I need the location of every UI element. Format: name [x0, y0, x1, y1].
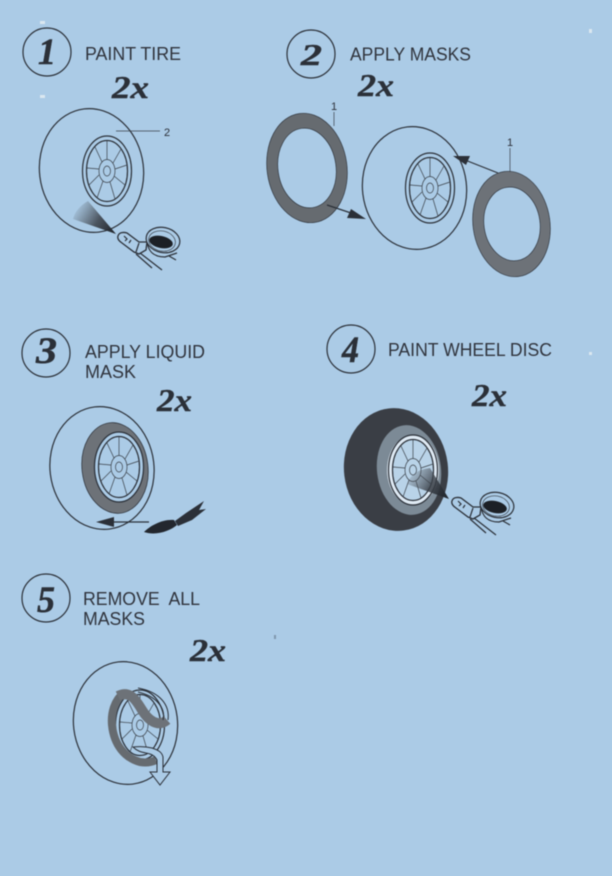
left callout 1 — [331, 101, 337, 126]
right callout 1 — [507, 137, 513, 172]
step 2 wheel — [355, 121, 474, 255]
step 1 quantity: 2x — [111, 69, 149, 105]
step 1 wheel — [32, 103, 151, 238]
step 5 heading — [83, 589, 200, 629]
left callout 1: 1 — [331, 101, 337, 113]
step 3 badge — [22, 329, 70, 377]
scan specks — [40, 21, 592, 639]
step 1 heading: PAINT TIRE — [85, 44, 181, 64]
step 4: paint wheel disc — [327, 325, 552, 537]
step 1 badge — [23, 28, 71, 76]
step 2: apply masks — [260, 30, 557, 282]
step 4 badge — [327, 325, 375, 373]
step 5 wheel — [66, 656, 185, 790]
step 3 wheel with mask — [43, 401, 161, 535]
step 4 heading: PAINT WHEEL DISC — [388, 340, 552, 360]
right mask ring — [466, 166, 557, 282]
step 2 heading: APPLY MASKS — [350, 44, 471, 64]
step 3 heading — [85, 342, 205, 382]
step 3 quantity: 2x — [156, 382, 192, 418]
step 1 airbrush — [118, 224, 182, 270]
step 4 quantity: 2x — [471, 377, 507, 413]
step 3 heading: MASK — [85, 362, 136, 382]
step 3 direction arrow — [96, 517, 149, 527]
icon: paint brush — [144, 501, 206, 533]
step 3 heading: APPLY LIQUID — [85, 342, 205, 362]
step 4 painted wheel — [337, 402, 455, 537]
step 1: paint tire — [23, 28, 182, 270]
step 2 badge — [287, 30, 335, 78]
step 3 badge: 3 — [35, 331, 57, 372]
step 1 callout 2 — [116, 127, 170, 139]
step 1 badge: 1 — [38, 32, 56, 73]
peeling mask strip — [112, 688, 168, 762]
right callout 1: 1 — [507, 137, 513, 149]
step 4 badge: 4 — [341, 330, 359, 371]
arrow to wheel from right ring — [453, 156, 498, 173]
left mask ring — [260, 108, 354, 228]
step 1 callout 2: 2 — [164, 127, 170, 139]
step 4 airbrush — [452, 489, 516, 535]
step 5 quantity: 2x — [189, 632, 226, 668]
step 5 badge — [22, 574, 70, 622]
arrow to wheel from left ring — [327, 205, 366, 219]
step 1 spray — [73, 201, 116, 234]
step 5: remove all masks — [22, 574, 226, 790]
step 5 badge: 5 — [37, 580, 55, 621]
step 3: apply liquid mask — [22, 329, 206, 535]
step 4 spray — [407, 468, 449, 499]
step 2 badge: 2 — [300, 37, 322, 72]
step 5 heading: MASKS — [83, 609, 145, 629]
step 2 quantity: 2x — [357, 67, 394, 103]
step 5 heading: REMOVE ALL — [83, 589, 200, 609]
removal arrow — [133, 747, 170, 785]
